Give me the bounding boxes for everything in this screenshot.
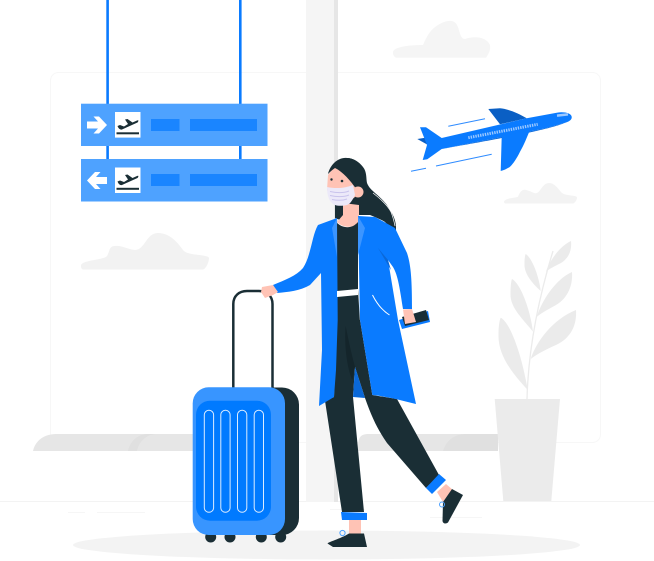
icon: right arrow (87, 116, 107, 134)
face (327, 166, 356, 205)
icon: plane takeoff (115, 112, 140, 138)
belly shade (442, 122, 566, 149)
eyes (330, 178, 343, 182)
far wing (488, 108, 527, 124)
coat: left panel and arm (273, 218, 338, 406)
ankles (349, 484, 453, 534)
cuff: near (341, 512, 367, 520)
icon: plane takeoff (115, 168, 140, 193)
panel: airport window frame (50, 72, 600, 442)
cockpit window (557, 114, 568, 116)
cloud: top (393, 21, 490, 58)
cloud: left (81, 233, 209, 270)
floor line (0, 502, 654, 518)
ground shadow (73, 530, 580, 560)
woman (261, 158, 463, 547)
cabin windows (468, 124, 538, 138)
stem (527, 251, 553, 399)
handle (233, 291, 272, 388)
bench: left (33, 434, 200, 451)
shoe: near (328, 534, 367, 547)
cuff: far (426, 474, 446, 494)
coat shade (378, 248, 391, 270)
case front (193, 387, 285, 535)
bench: right (358, 434, 498, 451)
coat lining between legs (353, 367, 365, 398)
sign: departures left (81, 159, 268, 202)
plant (495, 241, 576, 501)
shoe: far (442, 489, 463, 523)
tailplane back (417, 137, 430, 146)
pocket line (372, 295, 390, 315)
mask (327, 185, 355, 206)
coat: right panel and arm (358, 216, 416, 404)
fuselage and tail (420, 112, 572, 160)
lapels (332, 216, 365, 257)
near leg (325, 289, 364, 512)
trouser crease (345, 326, 355, 380)
icon: left arrow (87, 172, 107, 189)
cloud: right (504, 183, 577, 204)
hand on phone (403, 309, 416, 324)
far leg (345, 320, 439, 488)
airplane (411, 108, 572, 171)
hair back (335, 158, 396, 236)
hand on handle (261, 285, 278, 298)
pot (495, 399, 560, 501)
pillar (306, 0, 338, 502)
ear (352, 186, 364, 198)
wheels (205, 532, 286, 542)
case inner panel (196, 401, 271, 521)
hair front (328, 158, 366, 190)
hair highlight (373, 193, 395, 226)
speed lines (411, 119, 492, 171)
top (336, 222, 358, 292)
laces (340, 502, 444, 536)
sign poles (106, 0, 242, 160)
sign: departures right (81, 104, 268, 146)
belt (337, 289, 358, 297)
suitcase (193, 291, 299, 542)
leaves (498, 241, 576, 390)
phone (399, 310, 430, 329)
near wing (501, 130, 530, 171)
case back (240, 388, 299, 535)
ribs (204, 410, 264, 512)
neck and chest (337, 203, 359, 227)
